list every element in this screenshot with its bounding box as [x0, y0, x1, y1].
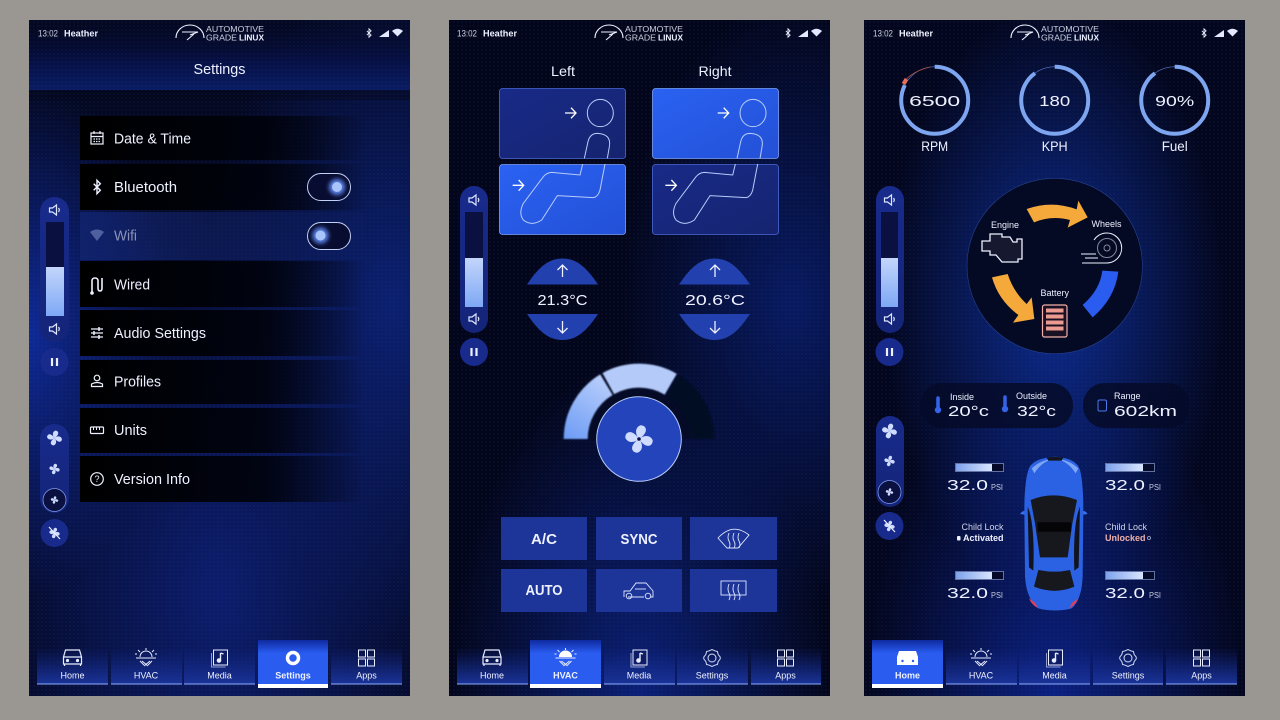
row: Bluetooth: Bluetooth	[114, 180, 177, 196]
label: Battery: Battery	[1040, 288, 1069, 298]
panel: HVAC	[449, 20, 830, 696]
icon: wheel	[1081, 233, 1122, 263]
gauge: RPM	[901, 67, 968, 154]
tab: Apps	[751, 647, 821, 684]
temperature control: left: 21.3°C	[538, 292, 588, 309]
button: A/C	[501, 517, 587, 560]
tab: Home	[37, 647, 108, 684]
tab: HVAC active	[530, 640, 601, 688]
tire pressure: front right	[1105, 464, 1161, 494]
tire pressure: rear left: 32.0	[947, 585, 988, 602]
bottom navigation	[37, 640, 402, 688]
label: Right: Right	[698, 63, 732, 79]
tab: Home: Home	[60, 670, 85, 680]
gauge: KPH: KPH	[1042, 138, 1068, 154]
tire pressure: front right: 32.0	[1105, 477, 1145, 494]
status bar	[873, 24, 1238, 42]
settings list	[80, 116, 365, 502]
icon: battery	[1042, 305, 1067, 337]
status bar: Heather	[64, 28, 99, 38]
row: Version Info	[80, 456, 365, 502]
tab: Home	[457, 647, 528, 684]
fan speed control	[40, 424, 69, 513]
row: Wifi	[80, 212, 365, 260]
button: rear defrost	[690, 569, 777, 612]
gauge: Fuel: 90%	[1155, 93, 1194, 110]
button: front defrost	[690, 517, 777, 560]
fan off button	[876, 512, 904, 540]
temperature control: right: 20.6°C	[685, 292, 745, 309]
tire pressure: rear right: PSI	[1149, 591, 1161, 600]
heading: Settings: Settings	[194, 62, 246, 78]
child lock: left: Activated	[963, 533, 1004, 543]
tab: Home active: Home	[895, 670, 920, 680]
button: recirculate	[596, 569, 682, 612]
temperature pill: 20°c	[948, 403, 990, 420]
child lock: right: Unlocked	[1105, 533, 1146, 543]
child lock: right: Child Lock	[1105, 522, 1148, 532]
icon: engine	[982, 234, 1022, 262]
tab: HVAC active: HVAC	[553, 670, 578, 680]
row: Profiles	[80, 360, 365, 404]
gauge: RPM: RPM	[921, 138, 948, 154]
pause button	[460, 338, 488, 366]
tab: HVAC	[111, 647, 182, 684]
label: Left: Left	[551, 63, 575, 79]
bottom navigation	[457, 640, 821, 688]
row: Audio Settings: Audio Settings	[114, 326, 206, 342]
temperature pill	[920, 383, 1073, 428]
volume control	[460, 186, 488, 333]
tab: Media: Media	[627, 670, 651, 680]
label: Engine: Engine	[991, 220, 1019, 230]
tab: Media	[604, 647, 675, 684]
arrow: engine to wheels	[1027, 201, 1088, 228]
tab: HVAC: HVAC	[969, 670, 994, 680]
row: Date & Time	[80, 116, 365, 160]
row: Wired: Wired	[114, 278, 150, 294]
row: Version Info: Version Info	[114, 472, 190, 488]
tab: Apps: Apps	[1191, 670, 1212, 680]
arrow: battery to wheels	[1083, 271, 1118, 317]
tab: Settings: Settings	[696, 670, 729, 680]
tab: Settings	[677, 647, 748, 684]
tab: HVAC	[946, 647, 1017, 684]
range pill	[1083, 383, 1190, 428]
row: Bluetooth	[80, 164, 365, 210]
status bar	[38, 24, 403, 42]
child lock: left: Child Lock	[961, 522, 1004, 532]
tab: Media: Media	[207, 670, 232, 680]
row: Units	[80, 408, 365, 453]
panel: Home dashboard	[864, 20, 1245, 696]
button: A/C: A/C	[531, 532, 558, 548]
range pill: Range	[1114, 391, 1141, 401]
row: Date & Time: Date & Time	[114, 132, 191, 148]
status bar	[457, 24, 822, 42]
seat control: left	[500, 88, 626, 234]
tab: Media	[184, 647, 255, 684]
seat control: right	[652, 88, 778, 234]
tire pressure: front left: 32.0	[947, 477, 988, 494]
volume control	[40, 197, 69, 342]
tire pressure: rear left: PSI	[991, 591, 1003, 600]
label: Wheels: Wheels	[1091, 219, 1122, 229]
row: Profiles: Profiles	[114, 374, 161, 390]
temperature control: left	[527, 258, 598, 340]
tab: Home: Home	[480, 670, 504, 680]
temperature pill: 32°c	[1017, 403, 1057, 420]
tire pressure: rear left	[947, 572, 1004, 602]
pause button	[876, 338, 904, 366]
arrow: engine to battery	[992, 274, 1034, 323]
gauge: KPH	[1021, 67, 1088, 154]
range pill: 602km	[1114, 403, 1177, 420]
tab: Apps: Apps	[775, 670, 796, 680]
row: Wifi: Wifi	[114, 228, 137, 244]
gauge: Fuel: Fuel	[1162, 138, 1188, 154]
temperature pill: Outside	[1016, 391, 1047, 401]
child lock: left	[957, 522, 1004, 543]
power flow diagram	[967, 178, 1142, 354]
panel: settings	[29, 20, 410, 696]
tab: Apps: Apps	[356, 670, 377, 680]
toggle: off	[308, 222, 350, 250]
tab: Settings: Settings	[1112, 670, 1145, 680]
gauge: KPH: 180	[1039, 93, 1070, 110]
icon: thermometer	[1003, 397, 1007, 407]
climate buttons	[501, 517, 777, 612]
status bar: 13:02	[457, 28, 477, 38]
fan off button	[40, 519, 68, 547]
button: SYNC	[596, 517, 682, 560]
tab: Settings active: Settings	[275, 670, 311, 680]
car top view	[1020, 457, 1088, 610]
icon: fuel can	[1098, 400, 1106, 411]
tab: HVAC: HVAC	[134, 670, 159, 680]
bottom navigation	[872, 640, 1237, 688]
button: AUTO	[501, 569, 587, 612]
toggle: on	[308, 174, 350, 200]
status bar: Heather	[483, 28, 518, 38]
tab: Apps	[331, 647, 402, 684]
row: Version Info: ?	[94, 474, 100, 484]
fan speed control	[876, 416, 904, 507]
tire pressure: rear right: 32.0	[1105, 585, 1145, 602]
tire pressure: front right: PSI	[1149, 483, 1161, 492]
status bar: 13:02	[38, 28, 58, 38]
temperature pill: Inside	[950, 392, 974, 402]
status bar: 13:02	[873, 28, 893, 38]
volume control	[876, 186, 904, 333]
gauge: RPM: 6500	[909, 93, 960, 110]
child lock: right	[1105, 522, 1150, 543]
tab: Media: Media	[1042, 670, 1067, 680]
row: Wired	[80, 261, 365, 307]
row: Audio Settings	[80, 310, 365, 356]
tab: Settings	[1093, 647, 1163, 684]
pause button	[40, 348, 68, 376]
tire pressure: front left	[947, 464, 1004, 494]
icon: thermometer	[936, 398, 940, 408]
tire pressure: front left: PSI	[991, 483, 1003, 492]
tab: Home active	[872, 640, 943, 688]
status bar: Heather	[899, 28, 934, 38]
tab: Apps	[1166, 647, 1237, 684]
button: AUTO: AUTO	[526, 583, 562, 599]
gauge: Fuel	[1141, 67, 1208, 154]
tab: Settings active	[258, 640, 328, 688]
tire pressure: rear right	[1105, 572, 1161, 602]
fan dial	[576, 376, 702, 481]
tab: Media	[1019, 647, 1090, 684]
temperature control: right	[679, 258, 750, 340]
row: Units: Units	[114, 423, 147, 439]
button: SYNC: SYNC	[620, 532, 658, 548]
